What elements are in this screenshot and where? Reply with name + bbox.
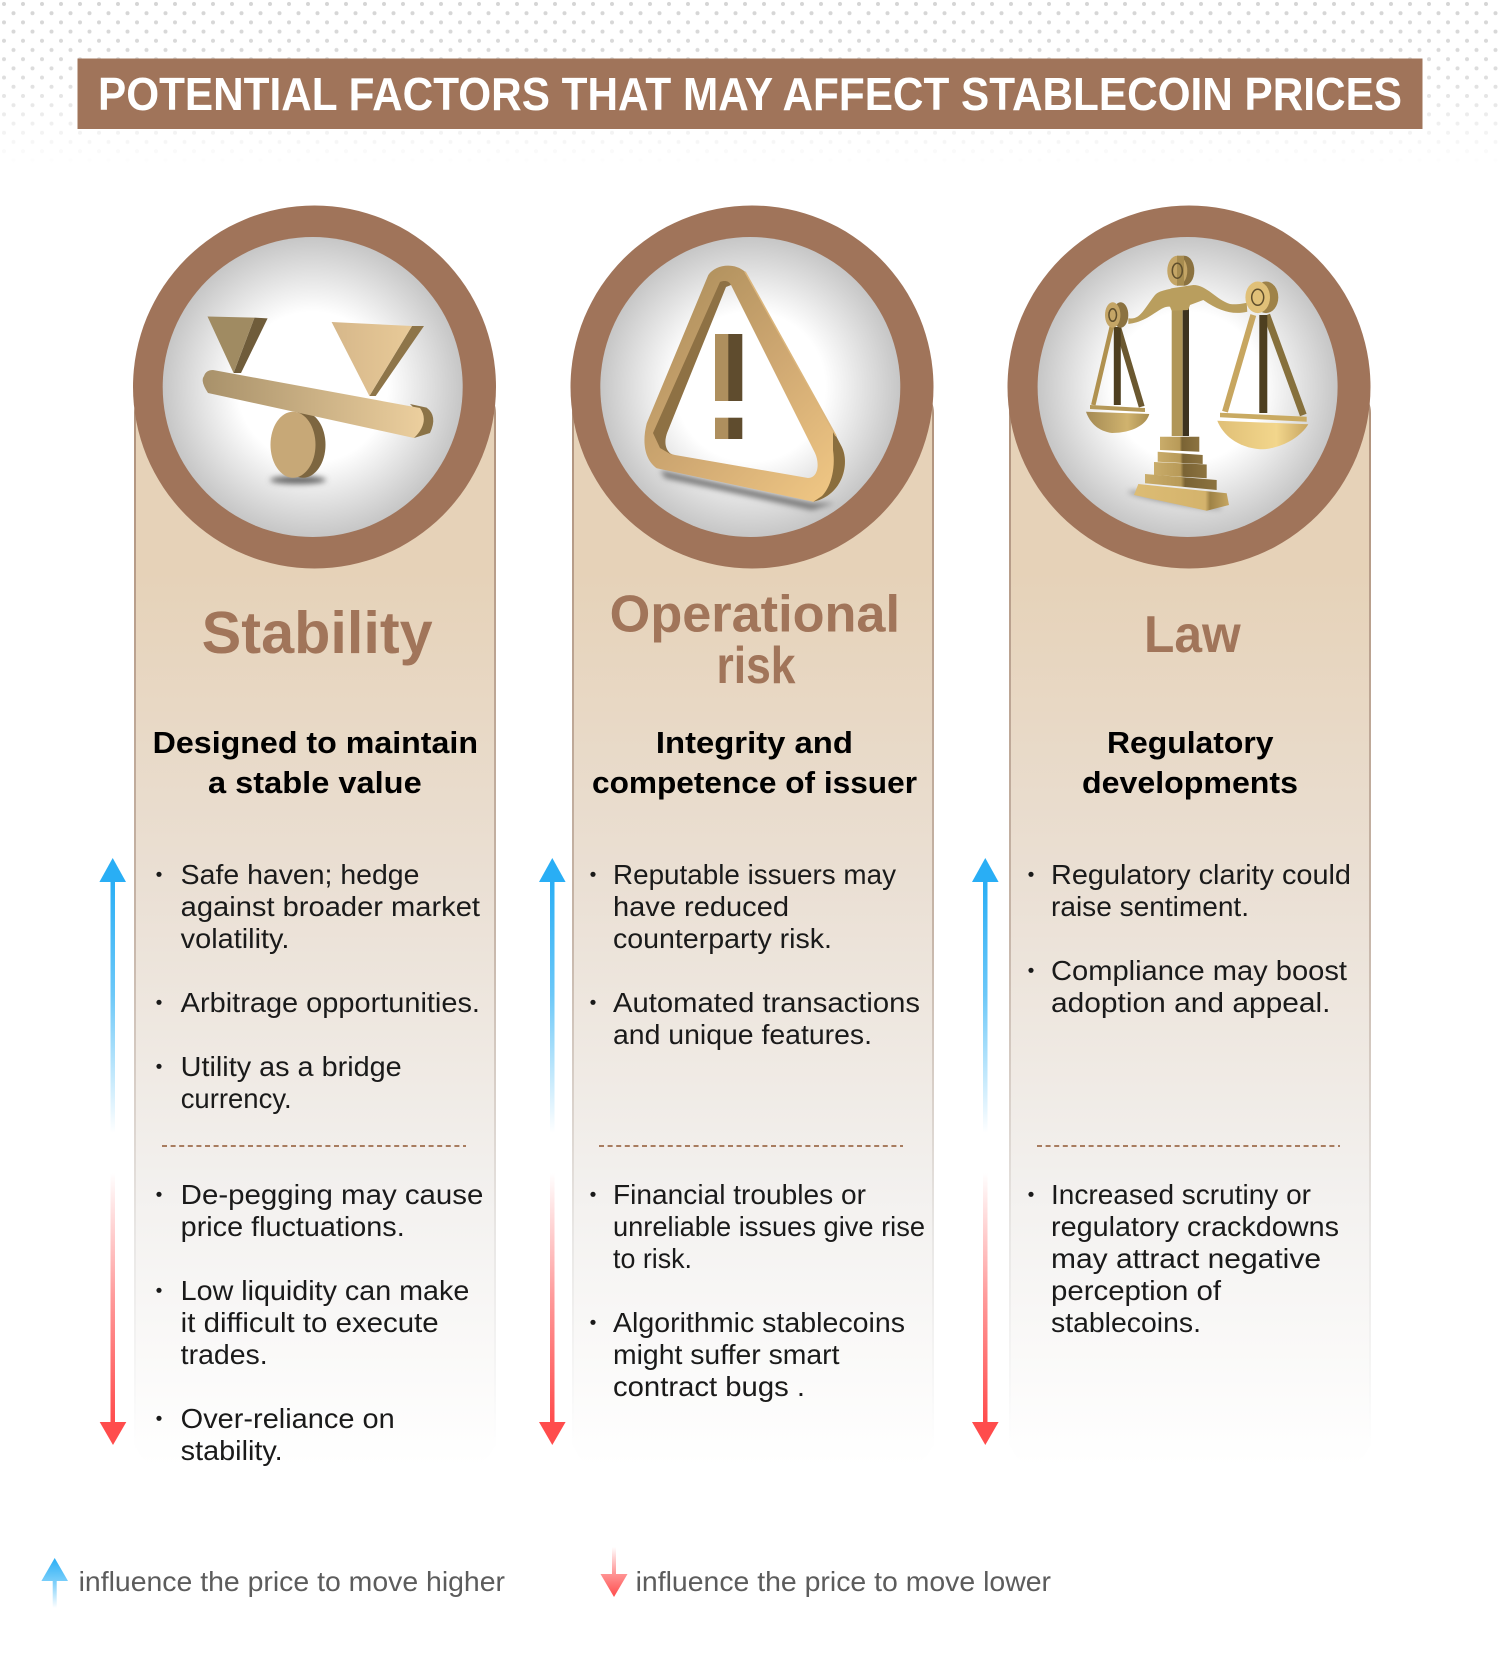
heading: [610, 586, 900, 695]
negative factors: perception of: [1051, 1275, 1221, 1306]
post: [1172, 308, 1189, 436]
arrow: up, operational risk: [539, 858, 566, 1133]
negative factors: Financial troubles or: [613, 1179, 866, 1210]
positive factors: Utility as a bridge: [181, 1051, 402, 1082]
panel: law: [1008, 206, 1370, 1467]
legend: price higher: influence the price to move higher: [79, 1566, 505, 1597]
subheading: competence of issuer: [592, 765, 917, 800]
legend: price higher: [41, 1558, 505, 1608]
subheading: a stable value: [208, 765, 422, 800]
heading: Operational: [610, 586, 900, 644]
positive factors: [590, 859, 920, 1050]
arrow: down, stability: [100, 1173, 126, 1445]
right pan: [1217, 282, 1308, 449]
negative factors: unreliable issues give rise: [613, 1211, 925, 1242]
subheading: [592, 725, 917, 800]
positive factors: counterparty risk.: [613, 923, 832, 954]
arrow: up, law: [972, 858, 999, 1133]
heading: risk: [716, 637, 796, 695]
positive factors: adoption and appeal.: [1051, 987, 1330, 1018]
negative factors: Algorithmic stablecoins: [613, 1307, 905, 1338]
negative factors: [156, 1179, 483, 1466]
title banner: POTENTIAL FACTORS THAT MAY AFFECT STABLECOIN PRICES: [98, 68, 1402, 120]
subheading: [153, 725, 478, 800]
top ring: [1167, 256, 1194, 286]
negative factors: [590, 1179, 925, 1402]
negative factors: price fluctuations.: [181, 1211, 405, 1242]
positive factors: [1028, 859, 1351, 1018]
negative factors: might suffer smart: [613, 1339, 840, 1370]
positive factors: Automated transactions: [613, 987, 920, 1018]
panel: stability: [133, 206, 496, 1467]
negative factors: trades.: [181, 1339, 268, 1370]
positive factors: and unique features.: [613, 1019, 872, 1050]
negative factors: Low liquidity can make: [181, 1275, 469, 1306]
positive factors: volatility.: [181, 923, 289, 954]
subheading: Designed to maintain: [153, 725, 478, 760]
legend: price lower: influence the price to move lower: [636, 1566, 1051, 1597]
negative factors: Over-reliance on: [181, 1403, 395, 1434]
left pan: [1086, 302, 1149, 433]
positive factors: Compliance may boost: [1051, 955, 1347, 986]
legend: price lower: [600, 1547, 1051, 1597]
arrow: down, operational risk: [539, 1173, 566, 1445]
negative factors: to risk.: [613, 1243, 692, 1274]
subheading: [1082, 725, 1298, 800]
negative factors: it difficult to execute: [181, 1307, 439, 1338]
negative factors: [1028, 1179, 1339, 1338]
arrow: down, law: [972, 1173, 999, 1445]
title banner: [78, 58, 1422, 129]
icon: balance scales: [1086, 256, 1308, 512]
negative factors: Increased scrutiny or: [1051, 1179, 1311, 1210]
positive factors: Regulatory clarity could: [1051, 859, 1351, 890]
arrow: up, stability: [99, 858, 126, 1133]
positive factors: Reputable issuers may: [613, 859, 896, 890]
exclamation mark: [715, 334, 742, 439]
negative factors: stablecoins.: [1051, 1307, 1201, 1338]
panel: operational risk: [570, 206, 934, 1467]
icon: seesaw: [203, 316, 433, 484]
beam: [1128, 285, 1247, 324]
positive factors: Arbitrage opportunities.: [181, 987, 480, 1018]
heading: Stability: [202, 600, 433, 666]
icon: warning triangle: [644, 266, 845, 510]
negative factors: may attract negative: [1051, 1243, 1321, 1274]
stepped base: [1134, 437, 1229, 511]
positive factors: have reduced: [613, 891, 789, 922]
negative factors: stability.: [181, 1435, 283, 1466]
positive factors: currency.: [181, 1083, 292, 1114]
subheading: Integrity and: [656, 725, 853, 760]
negative factors: De-pegging may cause: [181, 1179, 483, 1210]
subheading: Regulatory: [1107, 725, 1274, 760]
positive factors: raise sentiment.: [1051, 891, 1249, 922]
positive factors: against broader market: [181, 891, 480, 922]
positive factors: Safe haven; hedge: [181, 859, 419, 890]
positive factors: [156, 859, 480, 1114]
negative factors: contract bugs .: [613, 1371, 805, 1402]
heading: Law: [1144, 606, 1241, 664]
negative factors: regulatory crackdowns: [1051, 1211, 1339, 1242]
subheading: developments: [1082, 765, 1298, 800]
